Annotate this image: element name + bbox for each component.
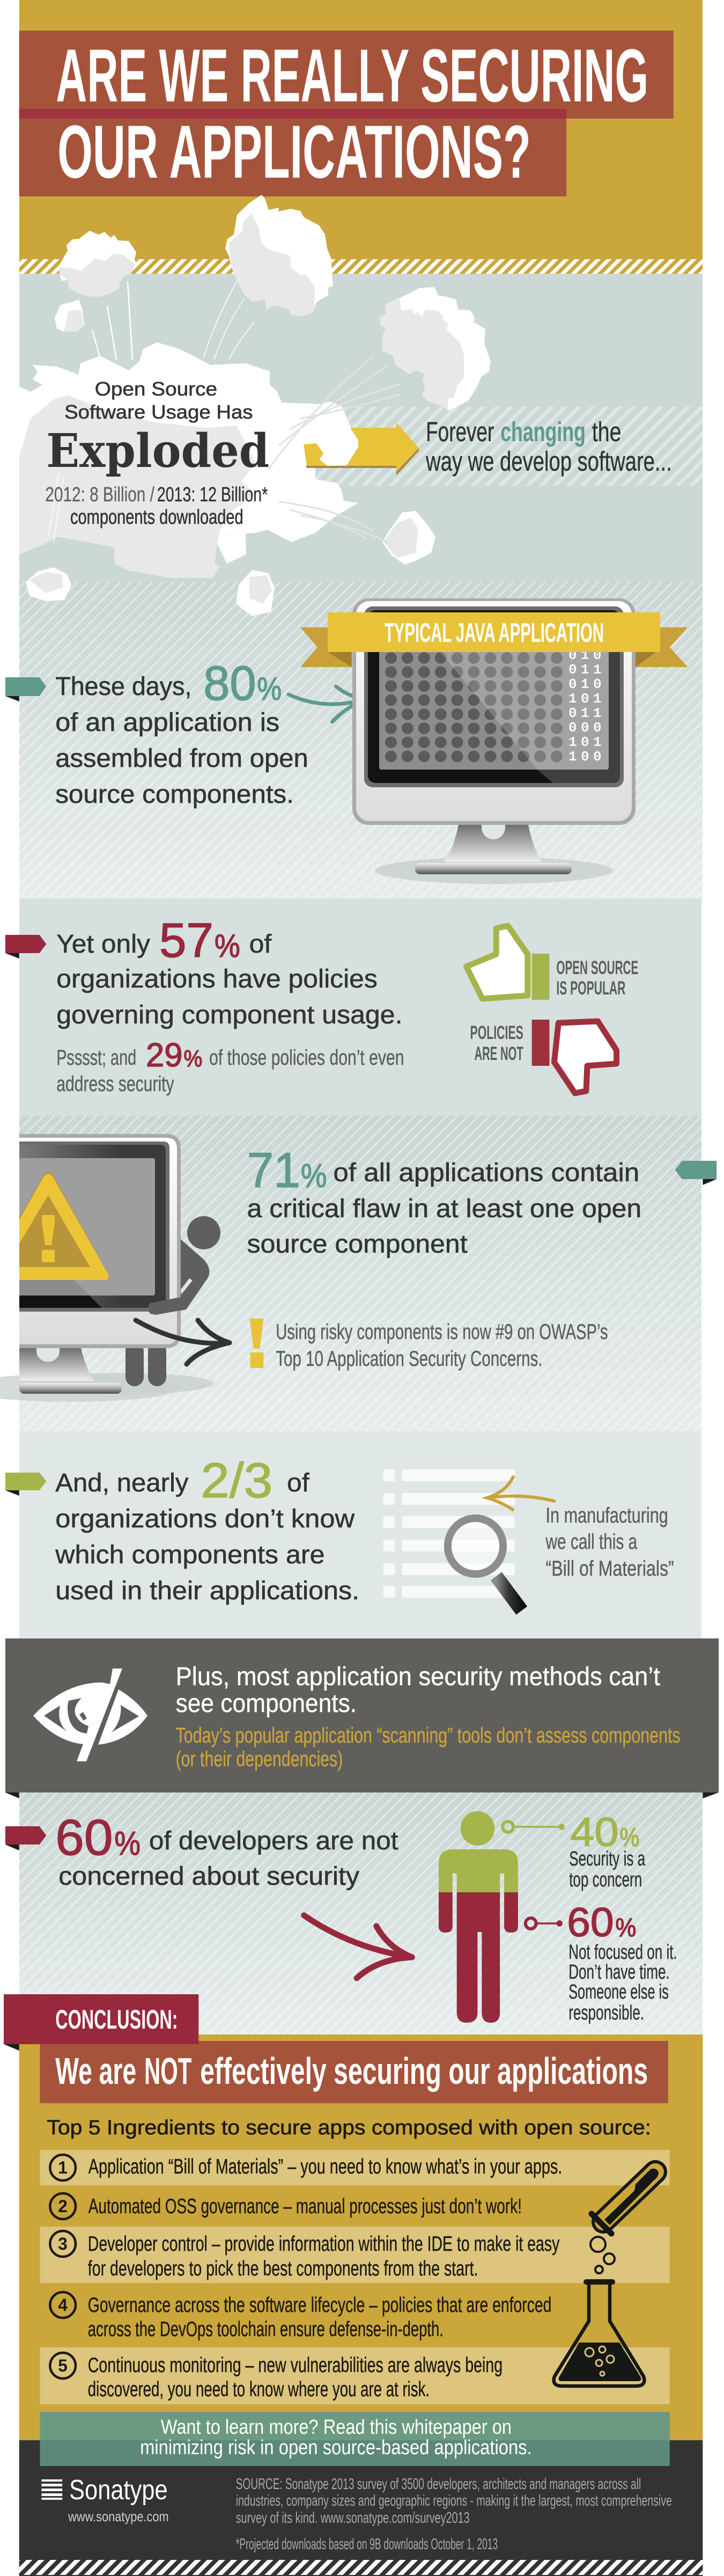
text: source components: source components.	[55, 780, 294, 809]
page background: section panels	[19, 0, 703, 2035]
stat: 60: 60	[55, 1809, 113, 1865]
icon: thumbs down	[470, 1020, 617, 1093]
icon: person split 40/60	[439, 1811, 564, 2023]
arrow: dark	[136, 1320, 230, 1364]
text: source: survey of its kind. www.sonatype.com/survey2013	[236, 2509, 470, 2527]
stat block: 40 percent: Security is a	[569, 1848, 646, 1870]
stat: 57: 57	[159, 914, 213, 968]
icon: bill of materials list with magnifier	[383, 1469, 554, 1611]
badge numbers	[58, 2158, 68, 2375]
stat block: 40 percent	[569, 1810, 646, 1891]
label: policies are not	[470, 1022, 523, 1064]
text: yet only: Yet only	[56, 930, 150, 958]
heading: we are not: NOT	[144, 2050, 191, 2092]
text: forever changing	[425, 416, 672, 477]
label: open source is popular: OPEN SOURCE	[556, 957, 638, 978]
ingredient text: across the DevOps toolchain ensure defense-in-depth.	[88, 2318, 444, 2341]
icon: thumbs up	[467, 926, 638, 1000]
ingredient text: Continuous monitoring – new vulnerabilities are always being	[88, 2354, 503, 2377]
text: manufacturing note: “Bill of Materials”	[546, 1557, 674, 1580]
panel: 57 percent	[5, 914, 404, 1096]
banner: typical java application	[300, 612, 688, 667]
text: of all applications contain: of all applications contain	[333, 1159, 639, 1187]
illustration: monitor with warning and person	[0, 1134, 230, 1402]
text: source: *Projected downloads based on 9B downloads October 1, 2013	[236, 2536, 498, 2553]
binary digits: 010	[568, 647, 605, 663]
logo: sonatype: Sonatype	[69, 2474, 168, 2505]
text: explosion stats	[45, 378, 269, 529]
person: legs	[125, 1342, 166, 1386]
stat block: 40 percent: %	[620, 1824, 639, 1852]
panel: title	[19, 31, 674, 196]
connector: top	[503, 1821, 564, 1832]
text: security methods: Plus, most application security methods can’t	[176, 1663, 660, 1691]
text: manufacturing note: we call this a	[545, 1530, 638, 1554]
label: open source is popular	[556, 957, 638, 999]
stat: percent sign: %	[114, 1825, 141, 1862]
text: organizations dont know: organizations don’t know	[55, 1505, 355, 1533]
text: used in their applications: used in their applications.	[55, 1577, 359, 1605]
text: psssst: Psssst; and	[56, 1046, 136, 1070]
text: see components: see components.	[176, 1689, 357, 1718]
panel: 80 percent	[5, 657, 365, 809]
text: of: of	[287, 1469, 310, 1497]
tag: red	[5, 1826, 46, 1850]
binary digits	[568, 647, 605, 765]
text: open source: Open Source	[95, 378, 217, 400]
label: policies are not: ARE NOT	[474, 1043, 523, 1064]
text: address security: address security	[56, 1072, 174, 1096]
panel: 60 percent developers	[5, 1809, 412, 1978]
text: software usage has: Software Usage Has	[64, 401, 253, 423]
illustration: explosion clouds	[19, 195, 491, 616]
connector: bottom	[526, 1918, 562, 1929]
person: arm over monitor	[148, 1297, 186, 1315]
illustration: monitor with java app	[300, 598, 688, 884]
arrow: yellow	[304, 422, 419, 475]
heading: we are not: We are	[55, 2050, 136, 2092]
text: owasp: Using risky components is now #9 on OWASP’s	[276, 1320, 608, 1344]
binary digits: 000	[568, 720, 605, 736]
binary digits: 011	[568, 662, 605, 678]
text: exploded: Exploded	[46, 425, 269, 478]
tag: conclusion: CONCLUSION:	[55, 2004, 178, 2035]
text: governing component usage: governing component usage.	[56, 1001, 402, 1029]
stat block: 60 percent: Don’t have time.	[568, 1961, 670, 1984]
text: dependencies: (or their dependencies)	[176, 1747, 343, 1771]
binary digits: 010	[568, 676, 605, 692]
text: 2013 figure: 2013: 12 Billion*	[157, 484, 268, 506]
number badges	[50, 2155, 76, 2379]
person: head and torso	[172, 1216, 220, 1312]
binary digits: 101	[568, 691, 605, 707]
label: open source is popular: IS POPULAR	[556, 978, 625, 999]
stat block: 60 percent	[567, 1900, 677, 2024]
ingredient text: discovered, you need to know where you are at risk.	[88, 2378, 430, 2401]
badge numbers: 5	[58, 2356, 68, 2375]
text: of an application is: of an application is	[55, 708, 279, 737]
panel: scanning band	[5, 1638, 719, 1798]
stat block: 40 percent: top concern	[569, 1869, 642, 1891]
icon: crossed eye	[33, 1668, 147, 1761]
stat: percent sign: %	[215, 928, 240, 964]
text: components downloaded: components downloaded	[70, 506, 243, 529]
ingredient rows	[40, 2150, 670, 2404]
text: and nearly: And, nearly	[55, 1469, 189, 1497]
ingredient text: Governance across the software lifecycle – policies that are enforced	[88, 2294, 551, 2317]
tag: teal	[675, 1161, 716, 1185]
badge numbers: 4	[58, 2295, 68, 2315]
stripe band behind arrow	[314, 407, 703, 486]
text: forever changing: Forever	[426, 416, 494, 447]
panel: two thirds	[5, 1453, 359, 1605]
stat block: 40 percent: 40	[570, 1810, 619, 1855]
heading: we are not	[55, 2050, 648, 2092]
ingredient text: Automated OSS governance – manual processes just don’t work!	[88, 2195, 522, 2218]
panel: footer	[19, 2412, 703, 2576]
text: manufacturing note: In manufacturing	[546, 1504, 668, 1527]
ingredient text: Application “Bill of Materials” – you need to know what’s in your apps.	[88, 2155, 562, 2178]
text: forever changing: the	[592, 416, 621, 447]
stat: 71: 71	[247, 1143, 300, 1198]
arrow: gold	[487, 1477, 554, 1510]
text: of those policies: of those policies don’t even	[209, 1046, 404, 1070]
panel: conclusion	[4, 1994, 703, 2440]
text: of developers: of developers are not	[149, 1827, 398, 1855]
stat: two thirds: 2/3	[201, 1453, 272, 1508]
label: policies are not: POLICIES	[470, 1022, 523, 1043]
tag: green	[5, 1473, 46, 1496]
text: organizations have policies: organizations have policies	[56, 965, 378, 993]
stat block: 60 percent: responsible.	[568, 2002, 644, 2024]
ingredient text	[88, 2155, 562, 2401]
call to action: Want to learn more? Read this whitepaper on	[161, 2416, 512, 2439]
tag: teal	[5, 677, 46, 701]
text: 2012 figure: 2012: 8 Billion /	[45, 484, 154, 506]
magnifier	[448, 1518, 522, 1611]
stat: percent sign: %	[257, 671, 282, 707]
icon: test tube and flask	[554, 2169, 659, 2386]
badge numbers: 3	[58, 2234, 68, 2253]
stat block: 60 percent: 60	[567, 1900, 614, 1945]
stat block: 60 percent: Not focused on it.	[568, 1941, 677, 1964]
text: a critical flaw: a critical flaw in at least one open	[247, 1195, 641, 1223]
heading: top 5 ingredients: Top 5 Ingredients to secure apps composed with open source:	[47, 2117, 651, 2139]
badge numbers: 1	[58, 2158, 68, 2177]
text: forever changing: changing	[500, 416, 586, 447]
text: source component: source component	[247, 1230, 468, 1258]
icon: warning triangle	[19, 1172, 109, 1280]
text: top 10: Top 10 Application Security Concerns.	[276, 1347, 543, 1371]
stat block: 60 percent: Someone else is	[568, 1981, 669, 2003]
text: source	[236, 2476, 672, 2553]
arrow: teal	[289, 686, 365, 722]
call to action	[40, 2412, 670, 2466]
arrow: red	[304, 1915, 412, 1978]
stat: 80: 80	[203, 657, 256, 711]
call to action: minimizing risk in open source-based applications.	[140, 2436, 532, 2459]
binary digits: 101	[568, 734, 605, 750]
stat: 29: 29	[146, 1037, 182, 1074]
stat: percent sign: %	[301, 1158, 327, 1195]
text: which components are: which components are	[55, 1541, 325, 1569]
binary digits: 100	[568, 749, 605, 765]
panel: 71 percent	[247, 1143, 716, 1371]
ingredient text: Developer control – provide information within the IDE to make it easy	[88, 2233, 560, 2256]
text: of: of	[249, 930, 272, 958]
icon: exclamation	[250, 1319, 263, 1368]
logo: sonatype	[41, 2474, 169, 2524]
badge numbers: 2	[58, 2197, 68, 2216]
ingredient text: for developers to pick the best components from the start.	[88, 2257, 478, 2280]
stat: percent sign: %	[183, 1045, 202, 1072]
text: concerned about security: concerned about security	[58, 1862, 359, 1891]
binary digits: 011	[568, 705, 605, 721]
text: these days: These days,	[55, 672, 191, 701]
tag: conclusion	[4, 1994, 198, 2051]
stat block: 60 percent: %	[616, 1914, 636, 1942]
text: manufacturing note	[545, 1504, 674, 1580]
logo: sonatype: www.sonatype.com	[68, 2509, 169, 2524]
text: assembled from open: assembled from open	[55, 744, 308, 773]
tag: red	[5, 935, 46, 958]
